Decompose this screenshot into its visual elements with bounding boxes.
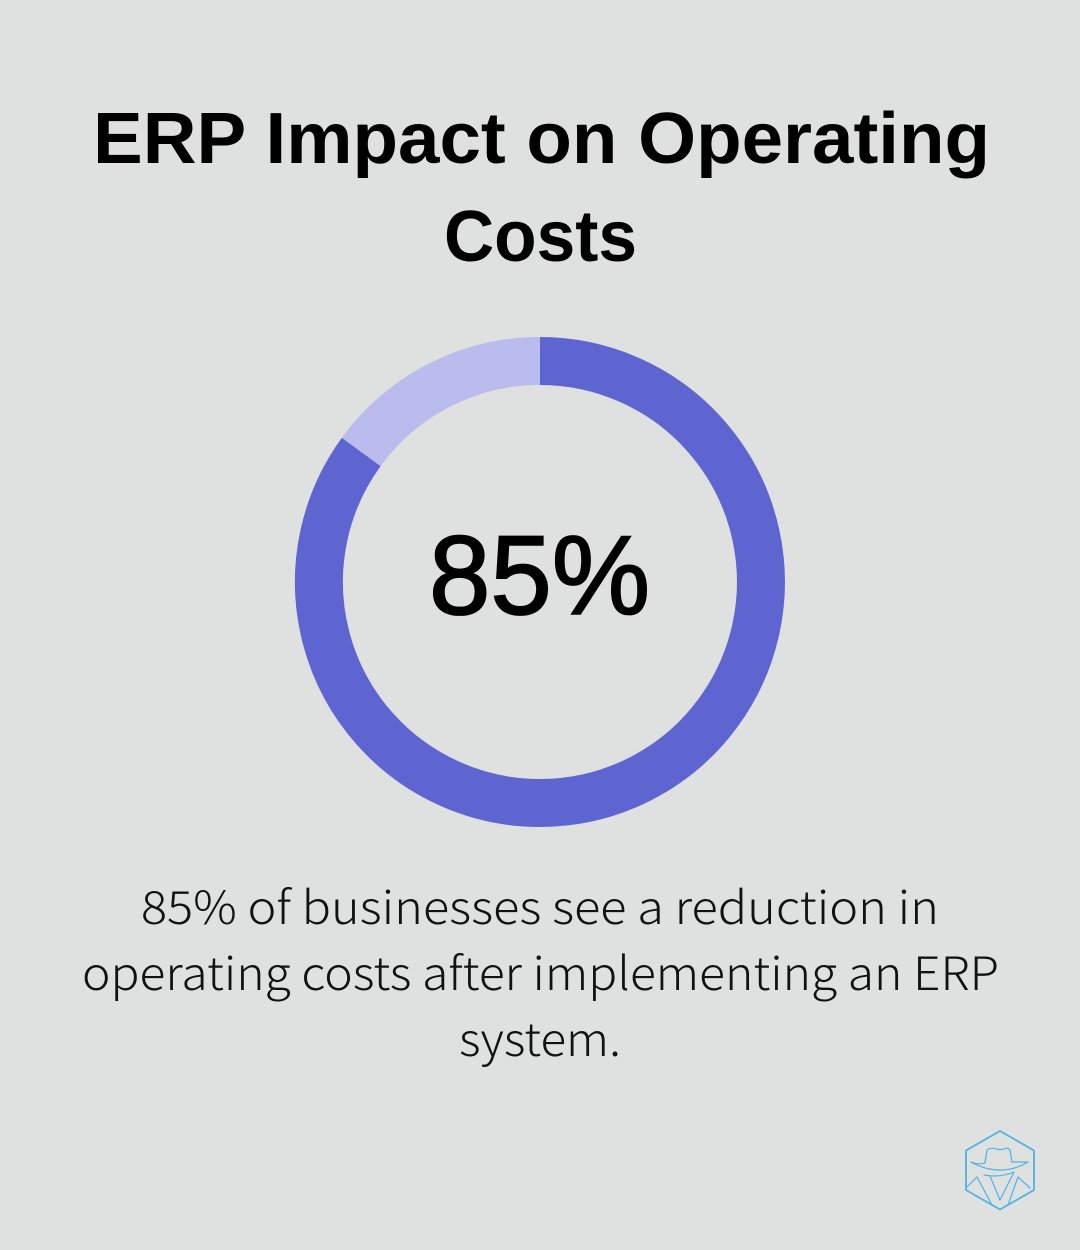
description text: system.	[459, 1004, 621, 1070]
remaining 15 percent segment	[361, 361, 540, 452]
85 percent segment	[319, 361, 761, 803]
title: ERP Impact on Operating	[93, 99, 990, 179]
hat	[971, 1148, 1028, 1170]
face and collar	[967, 1172, 1030, 1205]
description text: 85% of businesses see a reduction in	[141, 872, 939, 938]
donut chart: 85 percent	[319, 361, 761, 803]
hexagon outline	[966, 1131, 1034, 1210]
title: Costs	[444, 197, 637, 277]
description text	[82, 872, 999, 1070]
title	[93, 99, 990, 277]
description text: operating costs after implementing an ERP	[82, 938, 999, 1004]
icon: logo hexagon with hat figure	[966, 1131, 1034, 1210]
donut center value: 85%	[429, 513, 650, 638]
